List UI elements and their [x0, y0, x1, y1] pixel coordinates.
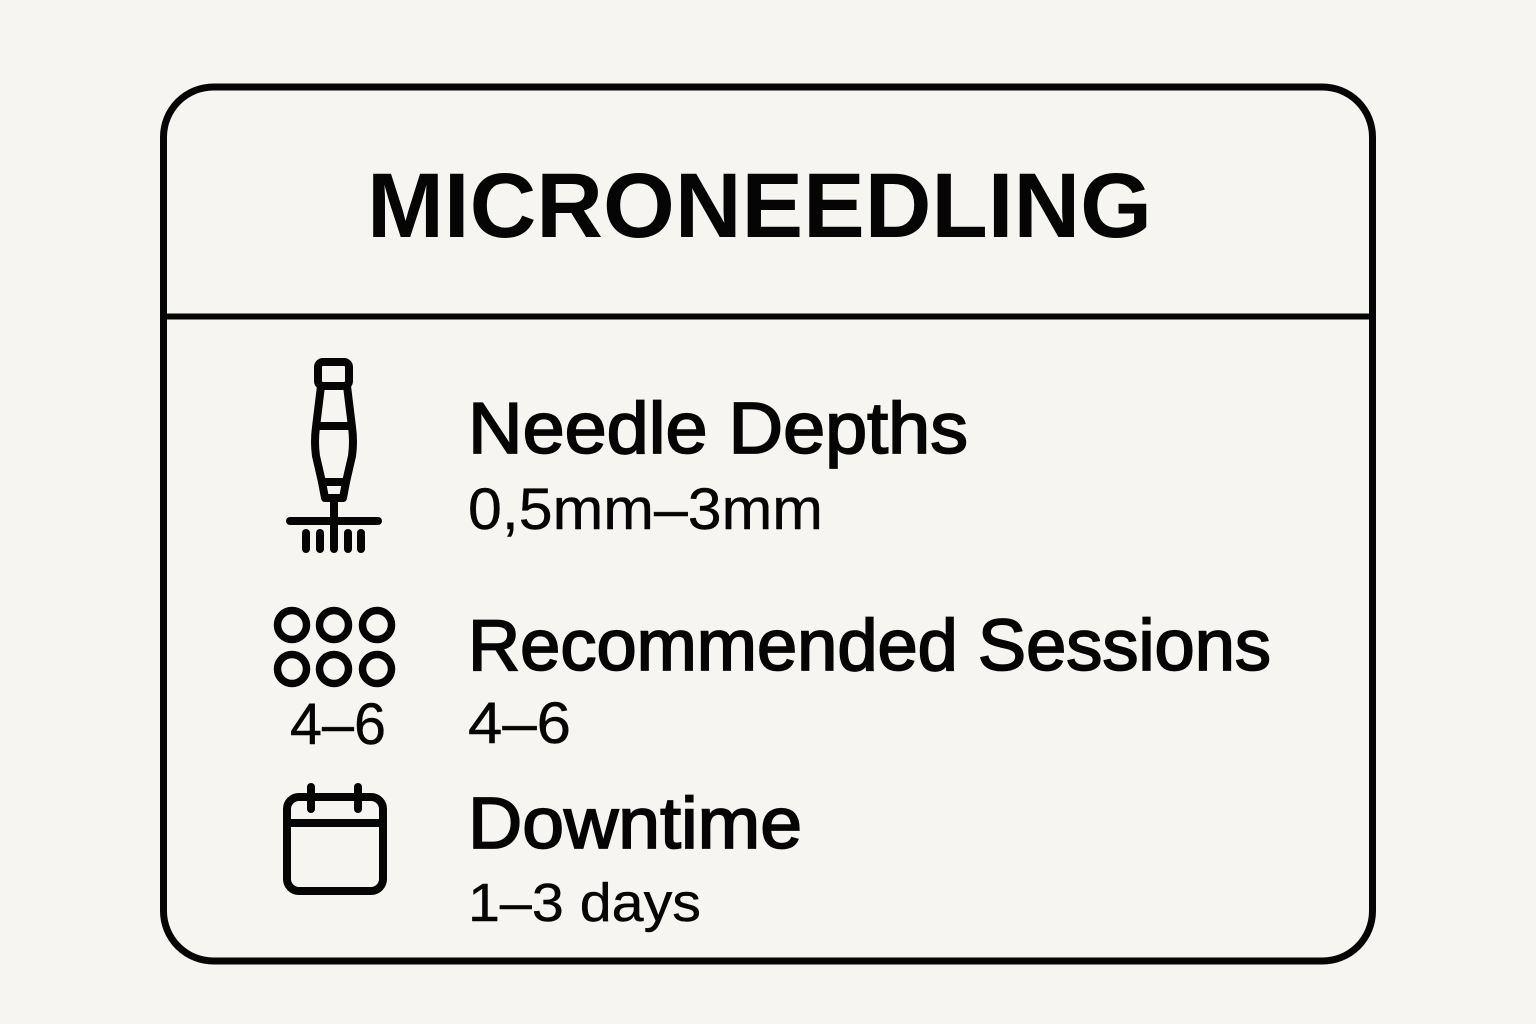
text: needle depths: Needle Depths	[468, 389, 968, 469]
text: needle depths: 0,5mm–3mm	[468, 477, 823, 542]
icon: microneedling pen	[290, 362, 378, 549]
text: recommended sessions: Recommended Sessions	[468, 606, 1271, 686]
text: needle depths	[468, 389, 968, 542]
panel: microneedling card	[164, 87, 1372, 961]
text: recommended sessions	[468, 606, 1271, 756]
text: downtime: 1–3 days	[468, 873, 701, 933]
icon label: sessions count: 4–6	[290, 692, 386, 757]
text: recommended sessions: 4–6	[468, 691, 571, 756]
icon: session circles	[278, 610, 392, 684]
title: MICRONEEDLING	[367, 155, 1152, 257]
text: downtime	[468, 784, 802, 933]
text: downtime: Downtime	[468, 784, 802, 864]
icon: calendar	[287, 787, 383, 891]
